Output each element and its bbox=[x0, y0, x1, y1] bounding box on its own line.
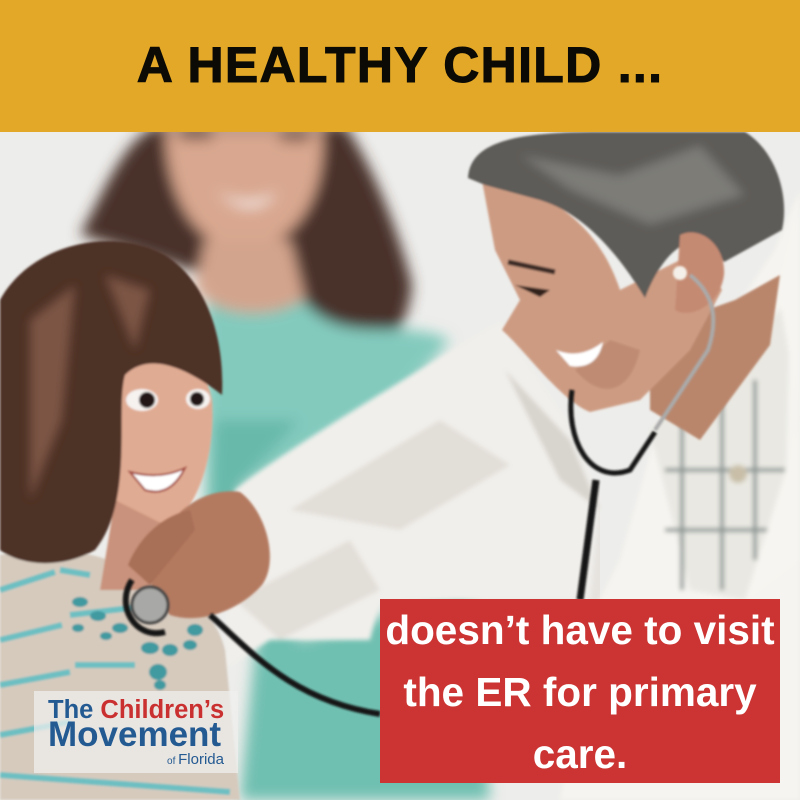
title: A HEALTHY CHILD ... bbox=[137, 37, 663, 93]
callout: red message box: doesn’t have to visit bbox=[385, 607, 775, 653]
doctor hand bbox=[128, 491, 270, 618]
background mother bbox=[80, 125, 490, 800]
callout: red message box bbox=[380, 599, 780, 783]
logo: The Children's Movement of Florida: Movement bbox=[48, 715, 221, 754]
child bbox=[0, 241, 240, 800]
callout: red message box: the ER for primary bbox=[403, 669, 757, 715]
shirt flower pattern bbox=[72, 597, 203, 690]
logo: The Children's Movement of Florida: of Florida bbox=[167, 751, 224, 768]
logo: The Children's Movement of Florida: The Children’s bbox=[48, 696, 224, 724]
callout: red message box: care. bbox=[533, 731, 627, 777]
header banner bbox=[0, 0, 800, 132]
doctor head bbox=[468, 132, 784, 440]
doctor coat bbox=[225, 190, 800, 800]
logo: The Children's Movement of Florida bbox=[34, 691, 238, 773]
stethoscope bbox=[126, 266, 713, 714]
